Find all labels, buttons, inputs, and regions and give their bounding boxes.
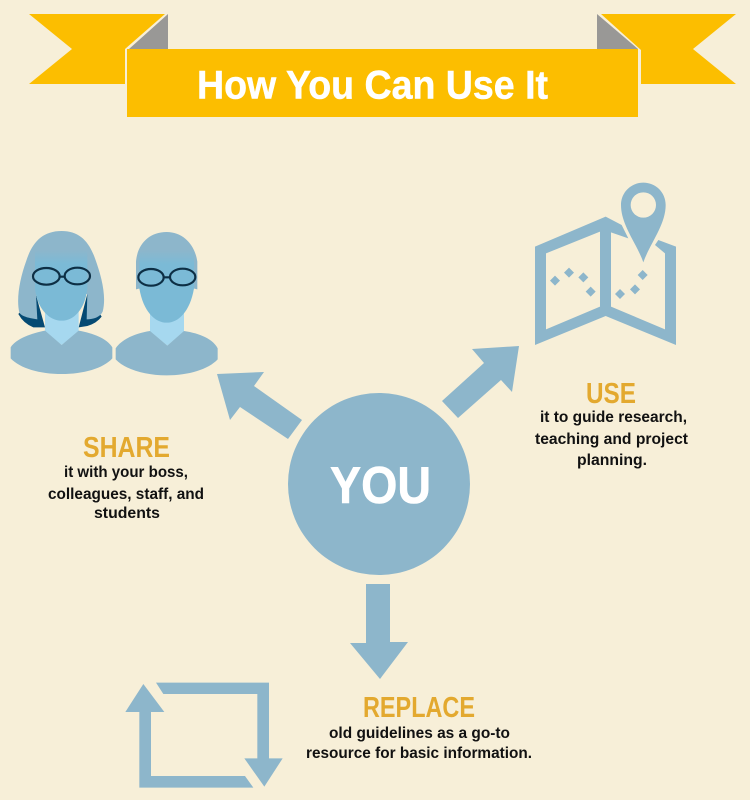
route dots [550, 268, 648, 299]
banner left tail [29, 14, 165, 84]
arrow: to use [442, 346, 519, 418]
text block: share [48, 432, 204, 522]
text block: share: colleagues, staff, and [48, 486, 204, 503]
location pin [621, 183, 666, 262]
text block: share: students [94, 505, 160, 522]
icon: replace cycle arrows [125, 683, 283, 788]
map outline [535, 217, 676, 345]
text block: use: USE [586, 378, 636, 410]
text block: share: SHARE [83, 432, 170, 464]
text block: use: planning. [577, 452, 647, 469]
center circle: you [288, 393, 470, 575]
banner right fold [597, 14, 638, 49]
text block: replace: resource for basic information. [306, 745, 532, 762]
center circle: you: YOU [330, 457, 431, 515]
text block: use [535, 378, 688, 469]
title text: How You Can Use It [197, 64, 548, 108]
banner left fold [129, 14, 168, 49]
text block: use: teaching and project [535, 431, 688, 448]
title banner [29, 14, 736, 117]
arrow: to share [217, 372, 302, 439]
person 1 [11, 231, 112, 374]
text block: replace: REPLACE [363, 692, 475, 724]
banner main band [127, 49, 638, 117]
text block: share: it with your boss, [64, 464, 188, 481]
icon: map with location pin [535, 183, 676, 345]
icon: two people with glasses [11, 231, 218, 375]
banner right tail [601, 14, 736, 84]
person 2 [116, 232, 218, 375]
text block: replace [306, 692, 532, 762]
text block: use: it to guide research, [540, 409, 687, 426]
arrow: to replace [350, 584, 408, 679]
text block: replace: old guidelines as a go-to [329, 725, 510, 742]
